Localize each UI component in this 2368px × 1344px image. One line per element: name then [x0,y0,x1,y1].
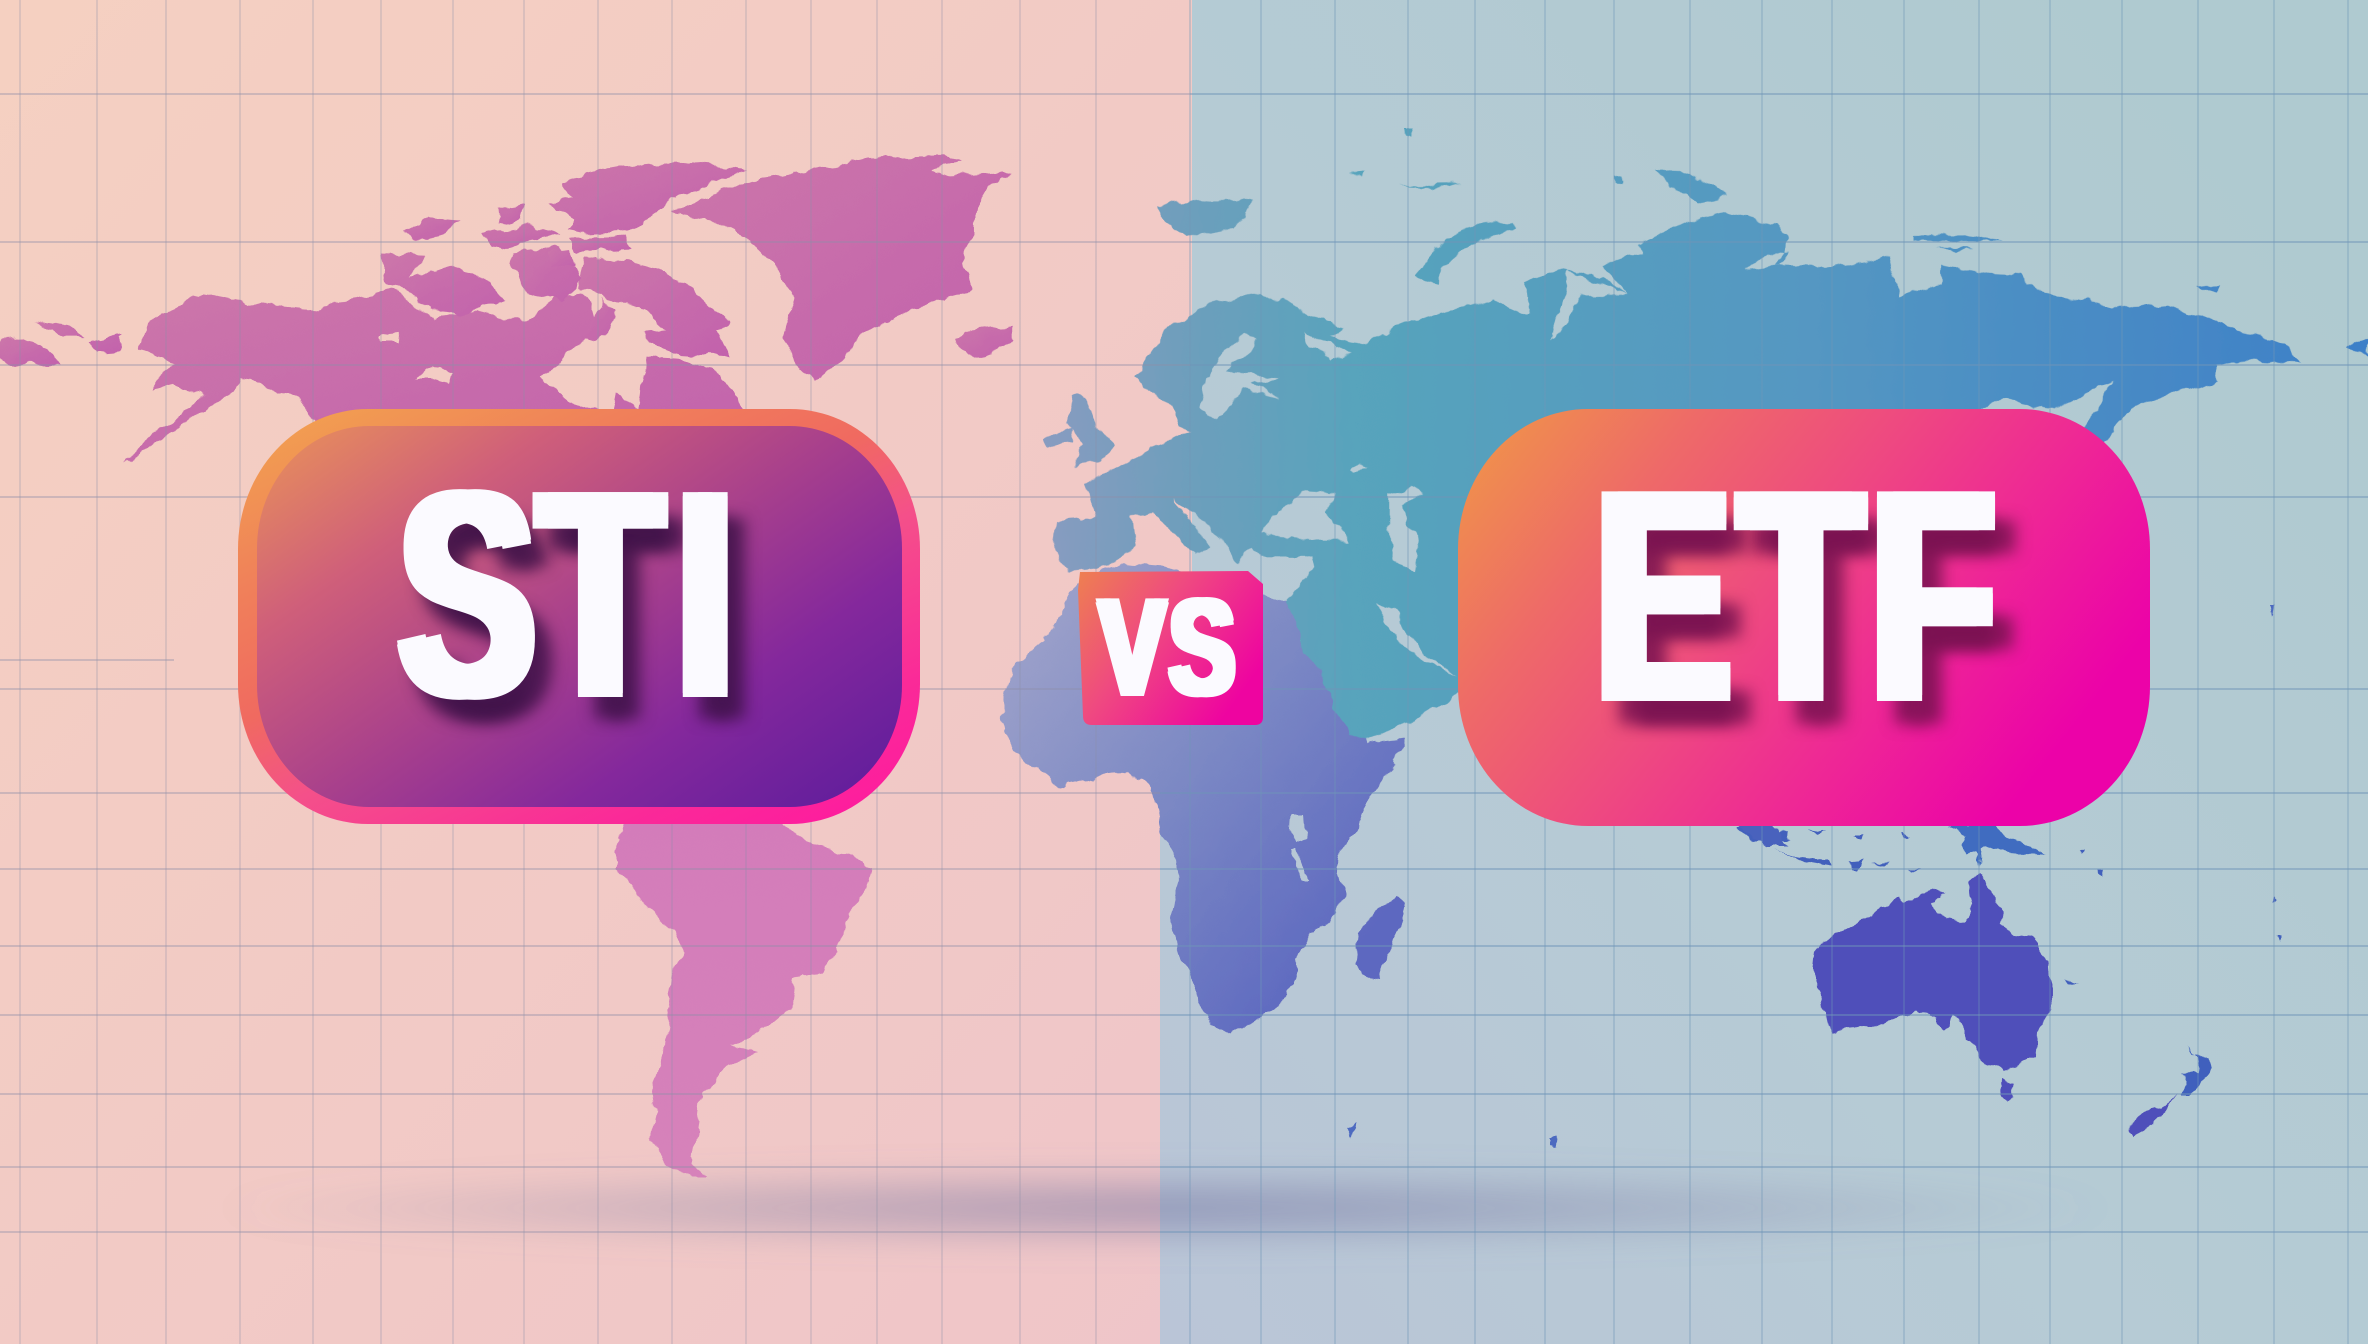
STI badge inner fill [257,426,902,807]
south america [616,807,873,1176]
VS label: VS [1099,571,1239,723]
speck islands in the southern ocean [1346,604,2276,1146]
southeast asia islands above australia [1735,820,1790,845]
badge: STI [238,409,920,824]
eurasia [1044,127,2368,741]
africa and madagascar [1000,564,1406,1034]
australia, new zealand and pacific islands [1736,825,2283,1137]
badge: ETF [1458,409,2150,826]
badge: VS [1078,571,1263,725]
STI label: STI [399,431,739,757]
ground shadow beneath the map [215,1166,2115,1250]
world map [0,127,2368,1176]
north america and greenland [0,156,1012,462]
ETF label: ETF [1596,430,2004,761]
